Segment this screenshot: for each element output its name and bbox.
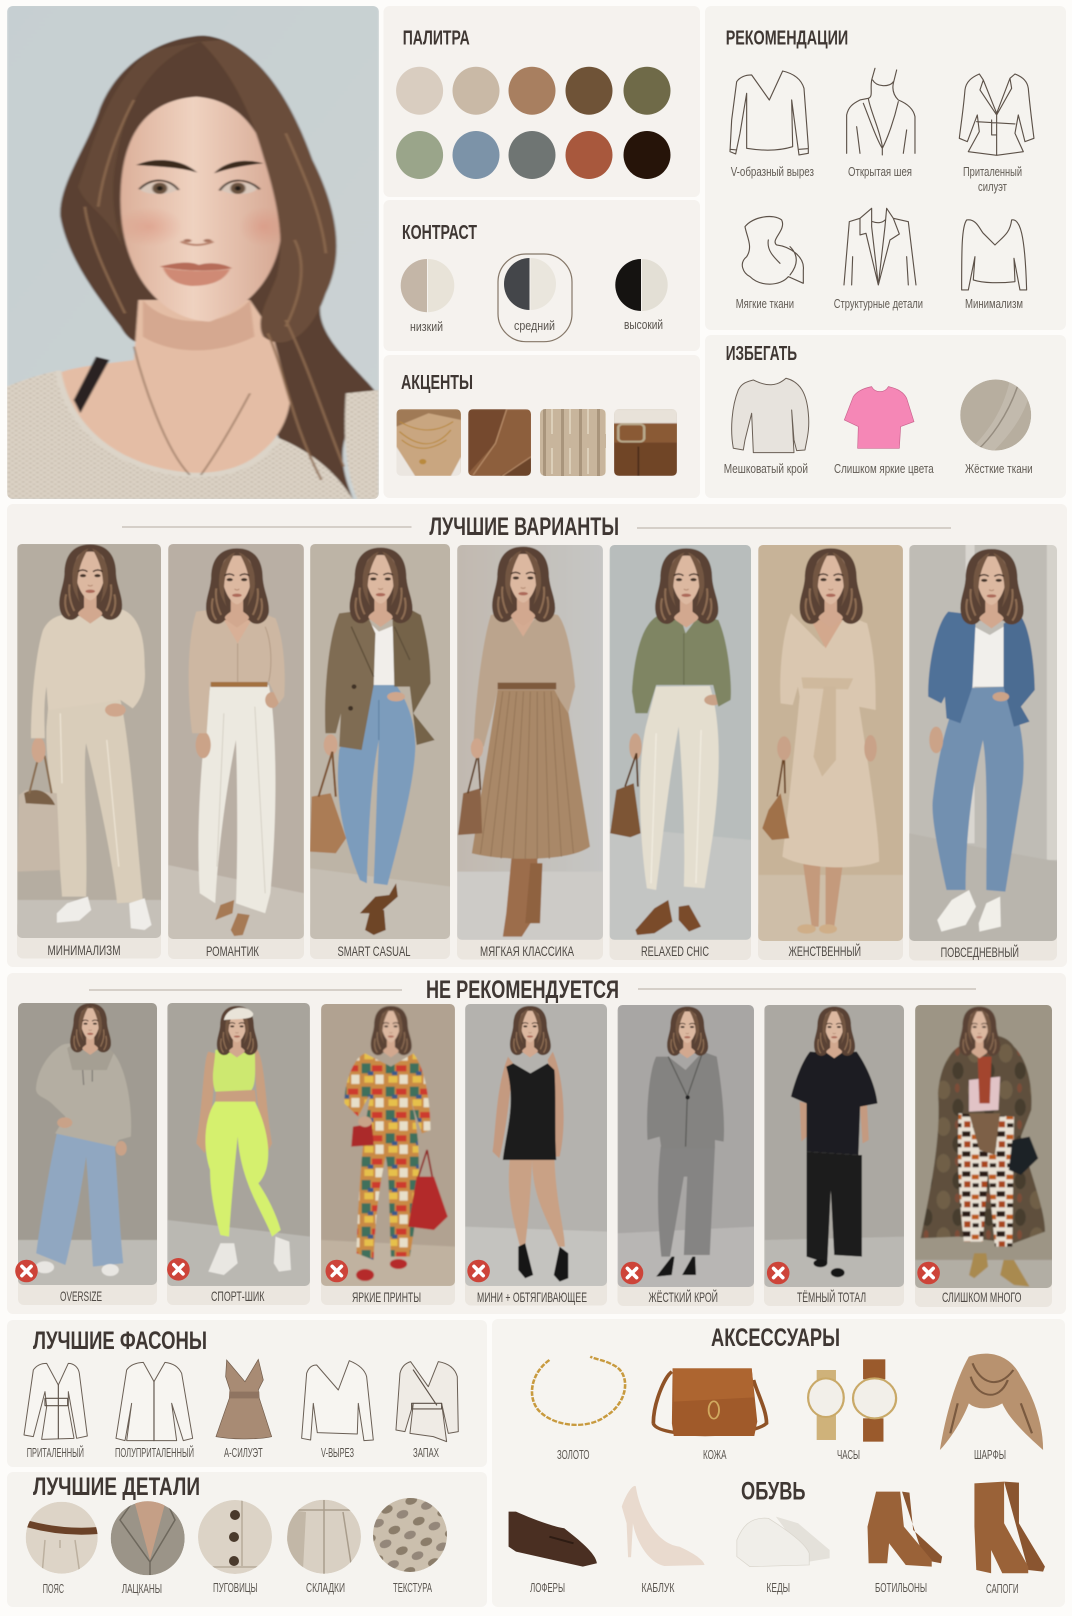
label: semi-fitted: ПОЛУПРИТАЛЕННЫЙ xyxy=(115,1445,194,1460)
detail: texture xyxy=(373,1498,447,1572)
outfit card: жёсткий крой: ЖЁСТКИЙ КРОЙ xyxy=(648,1288,718,1305)
icon: cross badge xyxy=(167,1258,190,1281)
outfit card: слишком много: СЛИШКОМ МНОГО xyxy=(942,1289,1022,1305)
heading: shoes: ОБУВЬ xyxy=(741,1478,806,1506)
icon: minimal top xyxy=(962,220,1027,290)
detail: buttons xyxy=(198,1500,272,1574)
icon: loafers xyxy=(509,1512,597,1567)
outfit card: мягкая классика xyxy=(457,543,603,960)
text: open neck: Открытая шея xyxy=(848,164,912,179)
icon: stiff fabric xyxy=(960,380,1031,455)
panel: best silhouettes xyxy=(7,1320,487,1467)
label: gold: ЗОЛОТО xyxy=(557,1447,590,1462)
icon: boots xyxy=(974,1482,1045,1573)
panel: palette xyxy=(384,6,700,197)
panel: best outfits xyxy=(7,504,1067,967)
label: scarves: ШАРФЫ xyxy=(974,1447,1006,1462)
outfit card: спорт-шик xyxy=(167,1002,310,1305)
text: minimalism: Минимализм xyxy=(965,296,1023,311)
contrast: high: высокий xyxy=(624,317,663,332)
label: pleats: СКЛАДКИ xyxy=(306,1580,345,1595)
detail: lapels xyxy=(111,1500,185,1575)
heading: best outfits: ЛУЧШИЕ ВАРИАНТЫ xyxy=(429,513,619,541)
text: fitted silhouette xyxy=(963,164,1022,194)
contrast: medium selected xyxy=(498,254,572,342)
heading: recommendations: РЕКОМЕНДАЦИИ xyxy=(726,28,848,50)
icon: ankle boots xyxy=(868,1492,942,1567)
label: boots: САПОГИ xyxy=(986,1581,1018,1596)
icon: a-line top xyxy=(216,1359,272,1439)
heading: palette: ПАЛИТРА xyxy=(403,28,470,50)
label: texture: ТЕКСТУРА xyxy=(393,1580,432,1595)
accent: knit xyxy=(540,409,606,476)
text: stiff fabrics: Жёсткие ткани xyxy=(965,461,1033,476)
text: v-neck: V-образный вырез xyxy=(731,164,814,179)
outfit card: тёмный тотал xyxy=(764,1003,905,1306)
outfit card: слишком много xyxy=(915,1003,1053,1307)
heading: not recommended: НЕ РЕКОМЕНДУЕТСЯ xyxy=(426,976,619,1004)
outfit card: мини + обтягивающее: МИНИ + ОБТЯГИВАЮЩЕЕ xyxy=(477,1289,587,1305)
text: fitted silhouette: Приталенный xyxy=(963,164,1022,179)
accent: belt xyxy=(614,409,677,476)
heading: avoid: ИЗБЕГАТЬ xyxy=(726,343,797,365)
icon: semi-fitted top xyxy=(116,1362,193,1441)
icon: cross badge xyxy=(326,1260,348,1282)
icon: cross badge xyxy=(621,1262,643,1284)
accent: gold necklace xyxy=(396,409,462,476)
label: v-neck: V-ВЫРЕЗ xyxy=(321,1445,354,1460)
outfit card: повседневный xyxy=(909,543,1058,960)
outfit card: relaxed chic xyxy=(610,543,752,960)
outfit card: тёмный тотал: ТЁМНЫЙ ТОТАЛ xyxy=(797,1288,866,1305)
icon: wrap top xyxy=(396,1362,458,1442)
text: structured details: Структурные детали xyxy=(834,296,923,311)
outfit card: smart casual: SMART CASUAL xyxy=(338,943,411,959)
panel: not recommended xyxy=(7,973,1066,1314)
outfit card: жёсткий крой xyxy=(617,1003,755,1306)
heading: best details: ЛУЧШИЕ ДЕТАЛИ xyxy=(33,1473,200,1501)
icon: baggy sweater xyxy=(732,378,809,453)
icon: cross badge xyxy=(15,1260,38,1282)
icon: gold bracelet xyxy=(532,1357,625,1425)
contrast: low: низкий xyxy=(410,319,443,334)
label: heels: КАБЛУК xyxy=(642,1580,675,1595)
icon: watches xyxy=(808,1359,896,1442)
accent: leather xyxy=(468,409,532,476)
outfit card: спорт-шик: СПОРТ-ШИК xyxy=(211,1288,265,1304)
detail: pleats xyxy=(285,1500,361,1575)
panel: portrait photo xyxy=(7,5,379,500)
outfit card: женственный xyxy=(758,543,903,960)
detail: belt xyxy=(26,1502,98,1575)
label: wrap: ЗАПАХ xyxy=(413,1445,439,1460)
label: loafers: ЛОФЕРЫ xyxy=(530,1580,565,1595)
icon: v-neck top xyxy=(302,1361,373,1441)
icon: open neck xyxy=(847,68,915,155)
heading: contrast: КОНТРАСТ xyxy=(402,222,477,244)
panel: recommendations xyxy=(705,6,1066,330)
icon: fitted top xyxy=(24,1363,87,1439)
icon: sneakers xyxy=(737,1517,830,1567)
heading: accents: АКЦЕНТЫ xyxy=(401,372,473,394)
label: leather: КОЖА xyxy=(703,1447,727,1462)
outfit card: яркие принты xyxy=(321,1002,456,1305)
panel: avoid xyxy=(705,335,1066,498)
outfit card: минимализм: МИНИМАЛИЗМ xyxy=(48,942,120,958)
icon: soft fabric xyxy=(742,217,803,284)
outfit card: smart casual xyxy=(310,543,451,959)
contrast: high xyxy=(615,259,668,332)
contrast: medium selected: средний xyxy=(514,318,555,333)
text: too bright colours: Слишком яркие цвета xyxy=(834,461,934,476)
icon: bright pink tee xyxy=(844,387,914,448)
label: a-line: А-СИЛУЭТ xyxy=(224,1445,263,1460)
heading: accessories: АКСЕССУАРЫ xyxy=(711,1324,840,1352)
panel: accessories and shoes xyxy=(492,1319,1065,1607)
contrast: low xyxy=(401,259,454,334)
outfit card: oversize xyxy=(15,1002,158,1305)
outfit card: минимализм xyxy=(17,543,162,958)
outfit card: романтик: РОМАНТИК xyxy=(206,943,260,959)
outfit card: мягкая классика: МЯГКАЯ КЛАССИКА xyxy=(480,943,574,959)
label: buttons: ПУГОВИЦЫ xyxy=(213,1580,258,1595)
icon: heels xyxy=(622,1486,705,1566)
icon: scarf xyxy=(940,1354,1043,1450)
label: fitted: ПРИТАЛЕННЫЙ xyxy=(27,1445,84,1460)
colour swatches xyxy=(396,67,670,179)
outfit card: женственный: ЖЕНСТВЕННЫЙ xyxy=(788,942,861,959)
outfit card: повседневный: ПОВСЕДНЕВНЫЙ xyxy=(941,943,1019,960)
heading: best silhouettes: ЛУЧШИЕ ФАСОНЫ xyxy=(33,1327,207,1355)
icon: cross badge xyxy=(467,1260,490,1282)
panel: best details xyxy=(7,1472,487,1607)
panel: accents xyxy=(384,355,700,498)
text: soft fabric: Мягкие ткани xyxy=(736,296,794,311)
outfit card: яркие принты: ЯРКИЕ ПРИНТЫ xyxy=(352,1289,421,1305)
label: ankle boots: БОТИЛЬОНЫ xyxy=(875,1580,927,1595)
label: watches: ЧАСЫ xyxy=(837,1447,860,1462)
label: belt: ПОЯС xyxy=(43,1581,64,1596)
icon: structured blazer xyxy=(844,208,916,285)
panel: contrast xyxy=(384,200,700,351)
label: lapels: ЛАЦКАНЫ xyxy=(122,1581,162,1596)
label: sneakers: КЕДЫ xyxy=(766,1580,790,1595)
icon: leather bag xyxy=(653,1368,767,1436)
outfit card: relaxed chic: RELAXED CHIC xyxy=(641,943,709,959)
icon: fitted jacket xyxy=(959,74,1034,155)
text: fitted silhouette: силуэт xyxy=(978,179,1007,194)
outfit card: oversize: OVERSIZE xyxy=(60,1288,102,1304)
icon: v-neck top xyxy=(730,71,808,155)
icon: cross badge xyxy=(767,1262,790,1284)
outfit card: мини + обтягивающее xyxy=(465,1002,608,1306)
outfit card: романтик xyxy=(168,543,304,959)
text: baggy cut: Мешковатый крой xyxy=(724,461,808,476)
icon: cross badge xyxy=(917,1262,940,1284)
